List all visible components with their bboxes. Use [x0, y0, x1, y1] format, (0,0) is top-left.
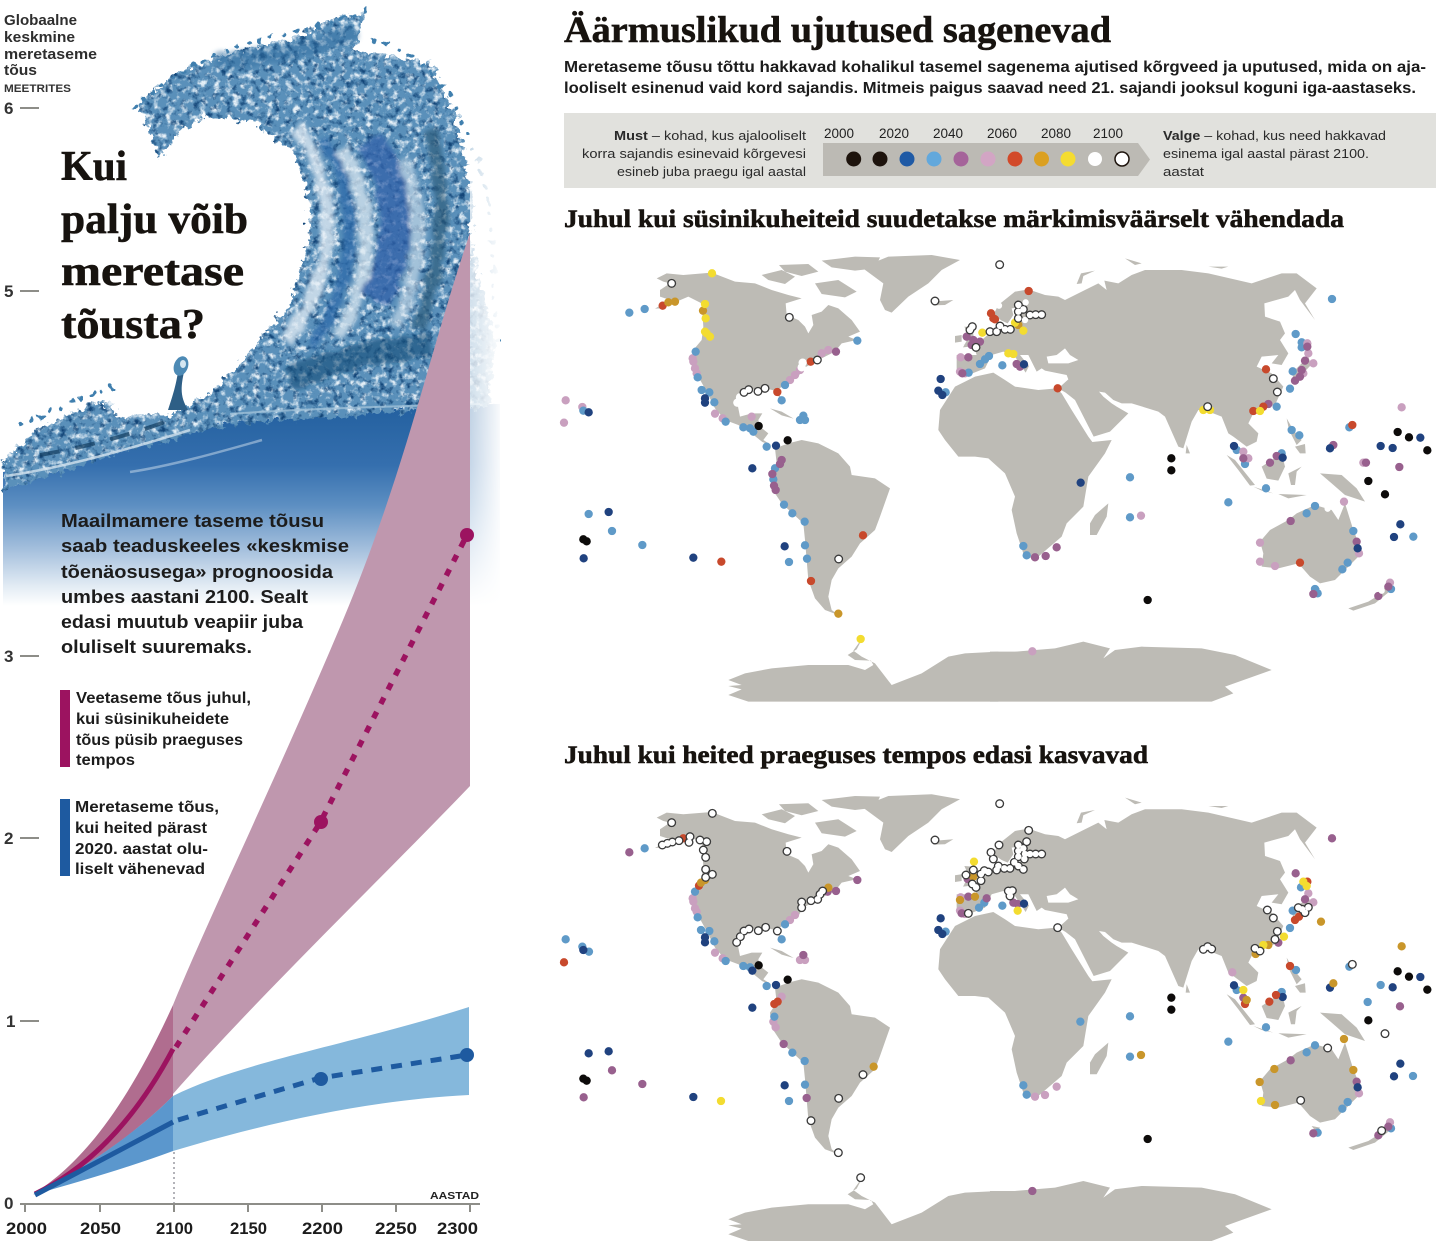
- intro paragraph: [564, 59, 1426, 97]
- legend: high emissions: Veetaseme tõus juhul,: [76, 690, 251, 707]
- intro paragraph: looliselt esinenud vaid kord sajandis. Mitmeis paigus saavad need 21. sajandi jooksul koguni iga-aastaseks.: [564, 80, 1416, 97]
- low emissions uncertainty band: [173, 1007, 469, 1151]
- flood dots west: [564, 273, 993, 639]
- sea water body: [3, 404, 500, 606]
- title: Äärmuslikud ujutused sagenevad: [564, 10, 1111, 51]
- legend: high emissions: tõus püsib praeguses: [76, 732, 243, 749]
- legend note: black: [582, 129, 807, 179]
- high emissions uncertainty band: [173, 233, 470, 1094]
- map: reduced emissions: [564, 255, 1427, 702]
- axis title: meretaseme: [4, 47, 97, 63]
- heading: growing emissions map: Juhul kui heited praeguses tempos edasi kasvavad: [564, 742, 1148, 769]
- axis title: [4, 13, 97, 95]
- data points: [314, 528, 474, 1086]
- legend note: white: Valge – kohad, kus need hakkavad: [1163, 129, 1386, 143]
- low line to 2100: [35, 1122, 173, 1195]
- low band until 2100: [33, 1096, 173, 1195]
- x axis: 2000: [6, 1219, 47, 1238]
- x axis: AASTAD: [430, 1190, 479, 1202]
- legend years: 2020: [879, 126, 909, 141]
- intro text: umbes aastani 2100. Sealt: [61, 587, 308, 607]
- flood dots west: [564, 813, 993, 1178]
- x axis: 2250: [375, 1219, 417, 1238]
- x axis: 2100: [156, 1219, 193, 1238]
- flood dots east: [995, 265, 1427, 651]
- legend panel: [564, 113, 1436, 188]
- legend: high emissions: kui süsinikuheidete: [76, 711, 229, 728]
- intro text: oluliselt suuremaks.: [61, 637, 252, 657]
- y axis: [4, 99, 39, 1213]
- axis title: MEETRITES: [4, 83, 71, 95]
- legend years: 2080: [1041, 126, 1071, 141]
- intro text: tõenäosusega» prognoosida: [61, 562, 334, 582]
- intro text: saab teaduskeeles «keskmise: [61, 536, 349, 556]
- flood dots east: [997, 804, 1427, 1191]
- high line dashed after 2100: [176, 535, 467, 1047]
- intro text: Maailmamere taseme tõusu: [61, 511, 324, 531]
- high line to 2100: [35, 1049, 173, 1194]
- legend: reduced emissions: liselt vähenevad: [75, 861, 205, 878]
- right edge fade: [470, 60, 500, 620]
- legend: reduced emissions: 2020. aastat olu-: [75, 841, 208, 858]
- headline left: tõusta?: [61, 302, 205, 348]
- legend note: black: korra sajandis esinevaid kõrgevesi: [582, 147, 806, 161]
- legend note: white: aastat: [1163, 165, 1205, 179]
- headline left: [61, 144, 248, 348]
- legend: reduced emissions: [60, 799, 219, 878]
- intro text: [61, 511, 349, 657]
- world land: [655, 794, 1393, 1241]
- x axis: 2200: [302, 1219, 343, 1238]
- splash droplet: [168, 354, 191, 410]
- legend years: [824, 126, 1123, 141]
- y axis: 5: [4, 282, 13, 301]
- y axis: 3: [4, 647, 13, 666]
- axis 2100 marker: [173, 1152, 175, 1204]
- legend note: white: esinema igal aastal pärast 2100.: [1163, 147, 1369, 161]
- headline left: palju võib: [61, 197, 248, 243]
- legend: high emissions: tempos: [76, 752, 135, 769]
- legend years: 2100: [1093, 126, 1123, 141]
- legend note: black: esineb juba praegu igal aastal: [617, 165, 806, 179]
- legend: high emissions: [60, 690, 251, 769]
- legend: reduced emissions: Meretaseme tõus,: [75, 799, 219, 816]
- legend years: 2040: [933, 126, 963, 141]
- y axis: 0: [4, 1194, 13, 1213]
- axis title: Globaalne: [4, 13, 77, 29]
- wave illustration: [3, 10, 500, 620]
- map: growing emissions: [564, 794, 1427, 1241]
- chart: sea level rise projection: [4, 99, 480, 1238]
- legend: reduced emissions: kui heited pärast: [75, 820, 207, 837]
- y axis: 6: [4, 99, 13, 118]
- legend dots: [846, 152, 1129, 166]
- y axis: 2: [4, 829, 13, 848]
- low line dashed after 2100: [178, 1055, 467, 1120]
- water streaks: [6, 404, 480, 476]
- x axis: 2300: [437, 1219, 478, 1238]
- x axis: 2150: [230, 1219, 267, 1238]
- headline left: Kui: [61, 144, 127, 190]
- y axis: 1: [6, 1012, 15, 1031]
- intro text: edasi muutub veapiir juba: [61, 612, 304, 632]
- wave inner stripes: [215, 30, 440, 380]
- legend years: 2060: [987, 126, 1017, 141]
- spray bubbles: [20, 10, 498, 425]
- intro paragraph: Meretaseme tõusu tõttu hakkavad kohalikul tasemel sagenema ajutised kõrgveed ja uputused, mida on aja-: [564, 59, 1426, 76]
- heading: reduced emissions map: Juhul kui süsinikuheiteid suudetakse märkimisväärselt vähendada: [564, 206, 1345, 233]
- headline left: meretase: [61, 249, 244, 295]
- legend timeline arrow: [823, 143, 1150, 176]
- wave curl: [3, 15, 495, 490]
- axis title: tõus: [4, 63, 37, 79]
- band overlap until 2100: [33, 1005, 173, 1194]
- legend note: black: Must – kohad, kus ajalooliselt: [614, 129, 807, 143]
- legend years: 2000: [824, 126, 854, 141]
- x axis: 2050: [80, 1219, 121, 1238]
- x axis: [6, 1190, 480, 1238]
- axis title: keskmine: [4, 30, 75, 46]
- world land: [655, 255, 1393, 702]
- legend note: white: [1163, 129, 1386, 179]
